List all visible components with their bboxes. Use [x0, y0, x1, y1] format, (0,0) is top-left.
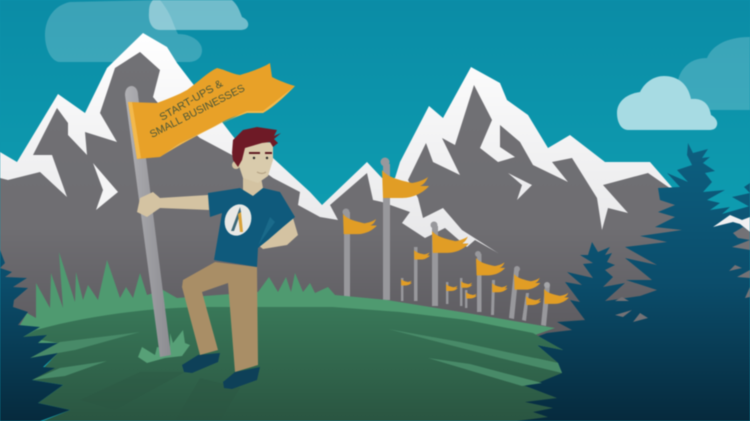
- flag pole 5: [401, 278, 412, 301]
- flag pole 8: [465, 290, 477, 308]
- eyes: [253, 157, 268, 159]
- hill: man's ground shadow: [80, 372, 240, 421]
- shoe right: [223, 367, 260, 389]
- flag pole: [125, 86, 171, 357]
- flag pole 9: [475, 251, 505, 312]
- cloud: small front right: [617, 76, 717, 130]
- small flags field: [342, 158, 569, 326]
- flag text: SMALL BUSINESSES: [148, 82, 247, 141]
- snow patch: right mountain: [508, 173, 532, 200]
- cloud: large back right: [678, 37, 750, 110]
- neck: [243, 172, 263, 196]
- mountains: snow silhouette: [0, 33, 690, 300]
- hill: light streaks: [30, 329, 562, 386]
- arm on hip: [258, 218, 298, 249]
- arm holding flag: [137, 192, 209, 217]
- eyebrows: [249, 152, 272, 154]
- mountains: grey rock: [0, 52, 750, 345]
- far right rock fragments: [615, 227, 750, 322]
- big flag with pole: [125, 63, 295, 357]
- t-shirt logo: [220, 201, 256, 239]
- hill: dark green body: [23, 307, 563, 421]
- snow patch: left mountain: [93, 163, 118, 210]
- ear: [232, 161, 240, 169]
- flag pole 10: [491, 280, 508, 315]
- flag lighter edge: [128, 86, 295, 159]
- t-shirt fold: [258, 217, 275, 246]
- hair: [232, 127, 281, 167]
- flag pole 2: [380, 158, 429, 300]
- flag pole 3: [430, 222, 469, 306]
- grass tuft at pole: [138, 330, 190, 363]
- flag pole 4: [414, 247, 430, 301]
- head: [238, 140, 273, 183]
- flag pole 13: [541, 282, 569, 326]
- flag pole 12: [522, 293, 541, 321]
- hill: light green grass band: [20, 252, 563, 380]
- trees: right dark forest: [480, 143, 750, 421]
- cloud: top left light: [149, 0, 248, 30]
- cloud: large back left: [45, 0, 202, 62]
- tree: far right edge: [732, 183, 750, 212]
- flag pole 6: [446, 282, 458, 304]
- t-shirt: [208, 188, 295, 267]
- mouth: [257, 172, 266, 174]
- flag text: START-UPS &: [158, 78, 225, 124]
- flag pole 7: [460, 278, 472, 306]
- far right snow: [713, 215, 750, 232]
- flag pole 11: [509, 266, 540, 319]
- trousers: [182, 262, 258, 372]
- orange flag banner: [128, 63, 295, 159]
- tree: left dark tree: [0, 250, 70, 421]
- man holding flag: [137, 127, 298, 389]
- flag pole 1: [342, 208, 377, 298]
- shoe left: [182, 353, 220, 373]
